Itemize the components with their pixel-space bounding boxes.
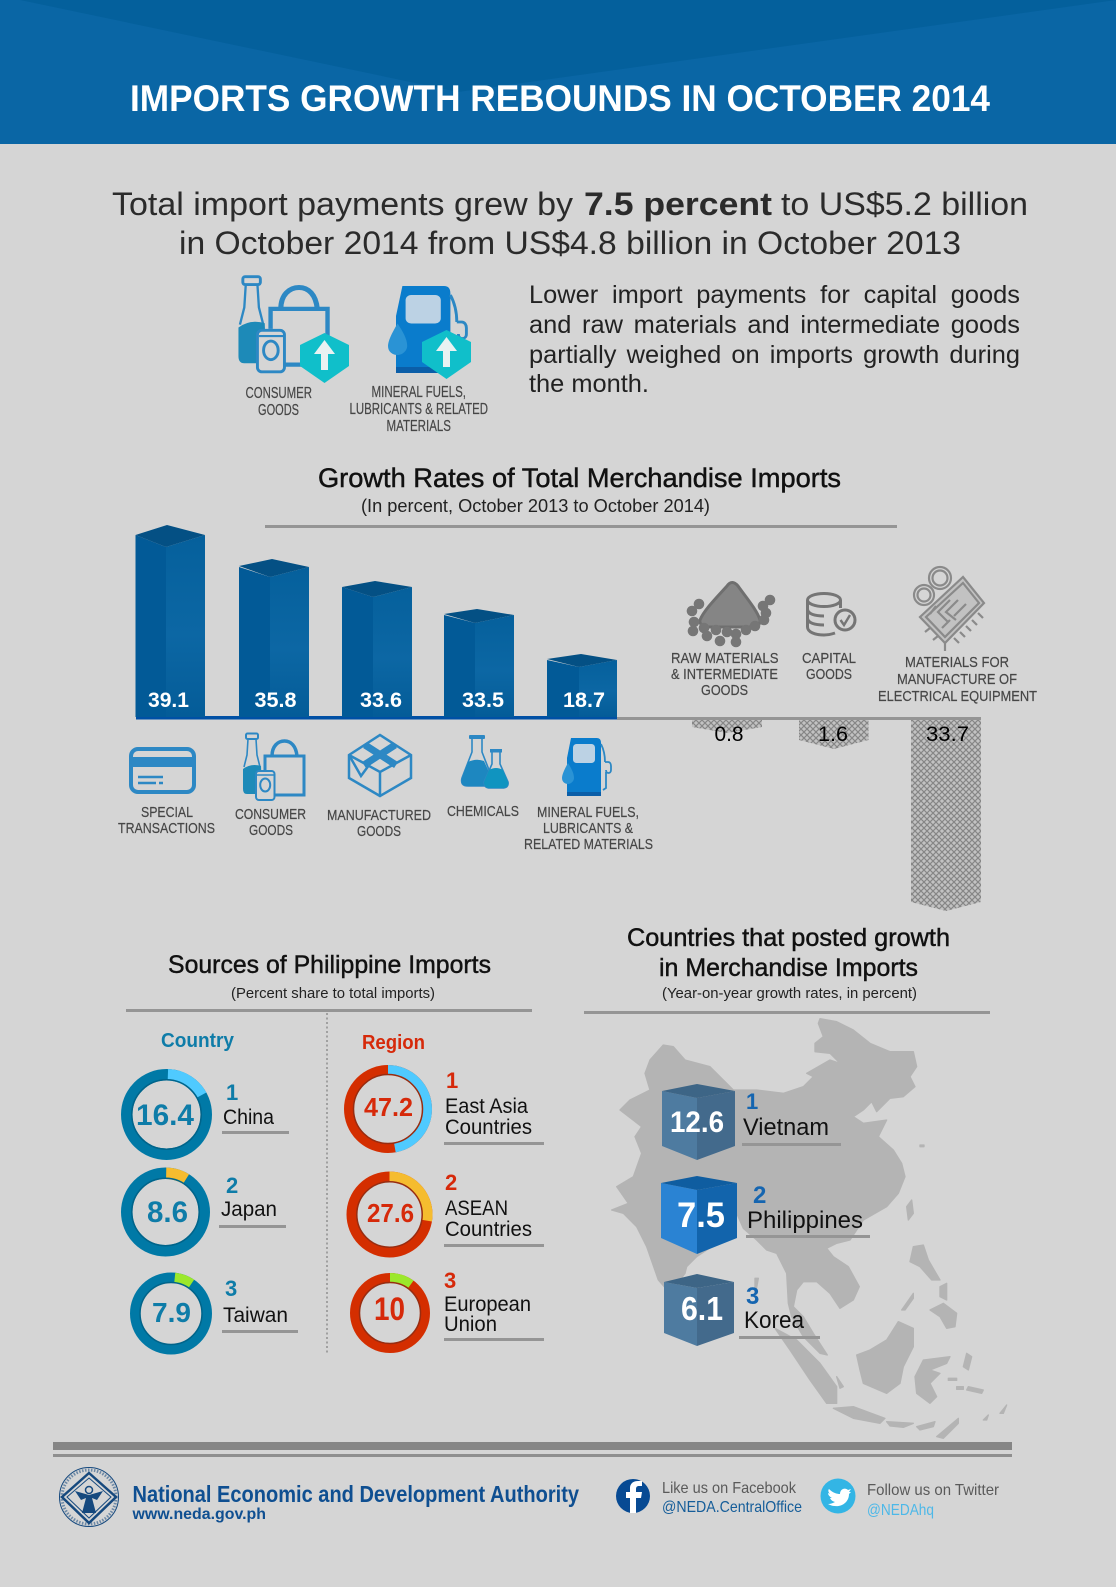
text: NEDA name and website: National Economic and Development Authority [132, 1481, 579, 1507]
headline statement [112, 186, 1028, 261]
label: raw materials: RAW MATERIALS [671, 650, 778, 667]
label: mineral fuels [524, 804, 653, 853]
bar: capital goods -1.6: 1.6 [818, 723, 848, 746]
hexagon: Philippines 7.5: 7.5 [677, 1196, 725, 1235]
donut: East Asia 47.2 [349, 1070, 427, 1148]
label: special transactions [118, 804, 215, 837]
icon: NEDA seal [60, 1468, 118, 1526]
chart heading: (In percent, October 2013 to October 2014) [361, 496, 710, 516]
text: partially weighed on imports growth during [529, 340, 1020, 368]
bar: electrical equipment -33.7 [911, 720, 981, 911]
label: materials for electrical equipment: ELECTRICAL EQUIPMENT [878, 688, 1037, 705]
label: Korea: 3 [746, 1283, 759, 1310]
map: Asia [612, 1019, 1007, 1438]
footer rules [53, 1442, 1012, 1457]
icon: chemicals flasks [462, 735, 508, 788]
label: mineral fuels: MINERAL FUELS, [537, 804, 639, 821]
label: chemicals: CHEMICALS [447, 803, 519, 820]
headline statement: Total import payments grew by [112, 186, 573, 222]
donut: Japan 8.6 [126, 1173, 205, 1251]
text: NEDA name and website [132, 1481, 579, 1523]
text: Twitter: Follow us on Twitter [867, 1482, 1000, 1499]
label: capital goods [802, 650, 856, 683]
label: Korea [739, 1283, 820, 1339]
label: special transactions: TRANSACTIONS [118, 820, 215, 837]
label: Philippines: Philippines [747, 1207, 863, 1234]
column heading: region: Region [362, 1032, 425, 1054]
text: Facebook: @NEDA.CentralOffice [662, 1499, 802, 1516]
label: ASEAN Countries: ASEAN [445, 1196, 508, 1220]
text: the month. [529, 370, 649, 398]
donut: China 16.4: 16.4 [136, 1099, 194, 1132]
label: consumer goods: CONSUMER [246, 385, 312, 402]
label: raw materials: & INTERMEDIATE [671, 666, 778, 683]
label: mineral fuels: LUBRICANTS & RELATED [350, 401, 488, 418]
label: Taiwan: 3 [225, 1276, 237, 1301]
hexagon: Philippines 7.5 [661, 1176, 737, 1254]
chart heading: Growth Rates of Total Merchandise Imports [318, 463, 841, 493]
text: and raw materials and intermediate goods [529, 311, 1020, 339]
heading: sources: Sources of Philippine Imports [168, 951, 491, 979]
panel: sources of Philippine imports [125, 951, 544, 1355]
heading: sources [126, 951, 532, 1012]
donut: European Union 10 [355, 1278, 425, 1348]
text: Twitter: @NEDAhq [867, 1502, 934, 1519]
label: mineral fuels: LUBRICANTS & [543, 820, 633, 837]
text: Facebook [662, 1480, 802, 1516]
column heading: country: Country [161, 1030, 235, 1052]
text: Facebook: Like us on Facebook [662, 1480, 797, 1497]
label: Korea: Korea [744, 1307, 805, 1334]
donut: European Union 10: 10 [374, 1291, 405, 1327]
label: Philippines: 2 [753, 1182, 766, 1209]
headline statement: to US$5.2 billion [781, 186, 1028, 222]
bar: consumer goods 35.8: 35.8 [254, 689, 297, 712]
label: consumer goods [235, 806, 306, 839]
donut: China 16.4 [125, 1073, 208, 1156]
label: European Union [444, 1268, 544, 1341]
label: consumer goods: CONSUMER [235, 806, 306, 823]
label: ASEAN Countries: 2 [445, 1170, 457, 1195]
bar: manufactured goods 33.6 [342, 581, 412, 717]
label: capital goods: GOODS [806, 666, 852, 683]
bar: capital goods -1.6 [799, 720, 868, 749]
donut: ASEAN 27.6 [352, 1177, 427, 1252]
label: European Union: Union [444, 1312, 497, 1336]
donut: ASEAN 27.6: 27.6 [367, 1198, 414, 1228]
label: ASEAN Countries: Countries [445, 1217, 532, 1241]
label: capital goods: CAPITAL [802, 650, 856, 667]
label: Taiwan: Taiwan [223, 1303, 288, 1327]
label: mineral fuels: MINERAL FUELS, [372, 384, 466, 401]
bar: chemicals 33.5: 33.5 [462, 689, 504, 712]
icon: Twitter [820, 1478, 856, 1514]
donut: East Asia 47.2: 47.2 [364, 1092, 413, 1122]
label: raw materials: GOODS [701, 682, 748, 699]
heading: countries: in Merchandise Imports [659, 954, 918, 982]
label: mineral fuels: MATERIALS [386, 418, 451, 435]
bar: raw materials -0.8: 0.8 [714, 723, 744, 746]
text: NEDA name and website: www.neda.gov.ph [132, 1506, 266, 1523]
icon: circuit chip and coins [914, 567, 984, 651]
hexagon: Korea 6.1 [664, 1274, 734, 1346]
label: mineral fuels [350, 384, 488, 435]
label: European Union: 3 [444, 1268, 456, 1293]
label: China: 1 [226, 1080, 238, 1105]
label: consumer goods: GOODS [249, 822, 293, 839]
bar: raw materials -0.8 [692, 720, 762, 746]
chart heading [265, 463, 897, 528]
heading: countries [584, 924, 990, 1014]
hexagon: Korea 6.1: 6.1 [681, 1290, 723, 1327]
hexagon: Vietnam 12.6 [662, 1084, 735, 1160]
bar chart: growth rates [136, 525, 981, 911]
label: Philippines [746, 1182, 870, 1238]
icon: manufactured goods box [349, 735, 411, 796]
bar: special transactions 39.1 [136, 525, 205, 717]
bar: mineral fuels 18.7: 18.7 [563, 689, 605, 712]
panel: countries that posted growth [584, 924, 1007, 1438]
donut: Taiwan 7.9: 7.9 [152, 1297, 191, 1328]
label: manufactured goods: MANUFACTURED [327, 807, 431, 824]
text: Twitter [867, 1482, 1000, 1519]
title: IMPORTS GROWTH REBOUNDS IN OCTOBER 2014 [130, 78, 990, 119]
label: China: China [223, 1105, 274, 1129]
heading: countries: (Year-on-year growth rates, in percent) [662, 985, 917, 1002]
icon: Facebook [616, 1479, 650, 1513]
label: materials for electrical equipment: MATERIALS FOR [905, 654, 1009, 671]
label: Japan: Japan [221, 1197, 277, 1221]
bar: manufactured goods 33.6: 33.6 [360, 689, 402, 712]
label: Japan [219, 1173, 286, 1228]
heading: sources: (Percent share to total imports) [231, 985, 435, 1002]
label: consumer goods: GOODS [258, 402, 299, 419]
label: mineral fuels: RELATED MATERIALS [524, 836, 653, 853]
bar: consumer goods 35.8 [239, 559, 309, 717]
label: materials for electrical equipment [878, 654, 1037, 705]
icon: consumer goods [243, 734, 304, 800]
label: European Union: European [444, 1292, 531, 1316]
donut: Taiwan 7.9 [132, 1274, 210, 1353]
text: Lower import payments for capital goods [529, 281, 1020, 309]
headline statement: in October 2014 from US$4.8 billion in October 2013 [179, 225, 961, 261]
hexagon: Vietnam 12.6: 12.6 [670, 1106, 724, 1139]
label: East Asia Countries [444, 1068, 544, 1145]
paragraph: lower import payments [529, 281, 1020, 398]
label: special transactions: SPECIAL [141, 804, 193, 821]
icon: raw materials pile [687, 582, 775, 647]
label: Vietnam: 1 [746, 1089, 758, 1114]
label: Vietnam: Vietnam [743, 1114, 829, 1141]
label: East Asia Countries: 1 [446, 1068, 458, 1093]
icon: mineral fuels with up arrow [388, 286, 471, 379]
bar: special transactions 39.1: 39.1 [148, 689, 189, 712]
label: Taiwan [222, 1276, 298, 1333]
icon: mineral fuels [562, 738, 611, 796]
bar: mineral fuels 18.7 [547, 654, 617, 717]
label: Japan: 2 [226, 1173, 238, 1198]
icon: special transactions card [131, 749, 194, 792]
label: consumer goods [246, 385, 312, 419]
donut: Japan 8.6: 8.6 [147, 1196, 188, 1229]
header banner [0, 0, 1116, 144]
headline statement: 7.5 percent [584, 186, 772, 222]
label: China [222, 1080, 289, 1134]
icon: capital goods database [808, 594, 855, 635]
label: raw materials [671, 650, 778, 699]
bar: chemicals 33.5 [444, 609, 514, 717]
label: ASEAN Countries [444, 1170, 544, 1247]
label: manufactured goods [327, 807, 431, 840]
label: East Asia Countries: Countries [445, 1115, 532, 1139]
label: Vietnam [742, 1089, 841, 1146]
bar: electrical equipment -33.7: 33.7 [926, 723, 969, 746]
label: East Asia Countries: East Asia [445, 1094, 528, 1118]
label: materials for electrical equipment: MANUFACTURE OF [897, 671, 1017, 688]
icon: consumer goods with up arrow [238, 277, 349, 383]
heading: countries: Countries that posted growth [627, 924, 950, 952]
label: manufactured goods: GOODS [357, 823, 401, 840]
